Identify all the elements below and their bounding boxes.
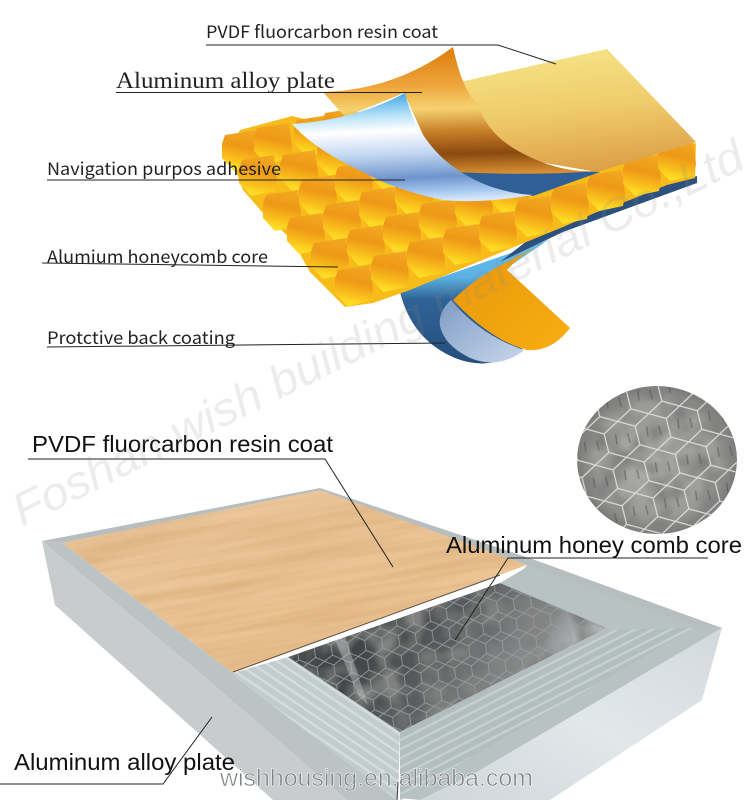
bottom label: PVDF coat: PVDF fluorcarbon resin coat (32, 431, 334, 457)
core base (228, 116, 696, 307)
bottom label: alloy plate (0, 717, 235, 784)
bottom label: honeycomb core: Aluminum honey comb core (446, 532, 742, 558)
front right rim (400, 628, 722, 800)
top label: adhesive: Navigation purpos adhesive (47, 155, 281, 180)
honeycomb window (285, 580, 610, 735)
icon: circular honeycomb detail (575, 385, 740, 535)
top rim (42, 488, 722, 628)
dark seam under wood (233, 575, 500, 672)
curl: orange underside (453, 243, 570, 350)
photo: aluminum panel box (42, 488, 722, 800)
rib ramp: top right (500, 567, 693, 630)
rib ramp: bottom right (400, 628, 693, 798)
left outer face (42, 541, 347, 800)
watermark: website: wishhousing.en.alibaba.com (219, 765, 533, 792)
orange aluminum peel (323, 47, 600, 174)
interior base (400, 565, 722, 800)
illustration: honeycomb core (222, 108, 697, 307)
rib ramp: left (233, 657, 400, 800)
top label: back coating (47, 324, 445, 349)
left rim (42, 541, 398, 800)
top label: PVDF coat (206, 18, 556, 64)
dark blue underside of peel (455, 166, 600, 196)
bottom label: honeycomb core (446, 532, 742, 640)
illustration: top plate and peeling layers (292, 47, 696, 201)
top label: honeycomb core: Alumium honeycomb core (47, 243, 268, 268)
illustration: bottom curled layers (400, 240, 570, 363)
corner seam (397, 782, 398, 800)
top label: PVDF coat: PVDF fluorcarbon resin coat (206, 18, 439, 43)
watermark: company name: Foshan wish building material Co.,Ltd (3, 129, 750, 536)
bottom label: PVDF coat (28, 431, 393, 567)
yellow resin plate (460, 49, 696, 172)
wood panel (62, 490, 526, 673)
top label: back coating: Protctive back coating (47, 324, 235, 349)
curl: dark blue back coating (400, 240, 548, 363)
hex cells (222, 108, 696, 306)
bottom label: alloy plate: Aluminum alloy plate (14, 749, 235, 775)
front right face (420, 628, 722, 800)
blue adhesive peel (292, 93, 533, 201)
curl: pale blue inner face (440, 300, 524, 363)
top label: aluminum alloy plate: Aluminum alloy plate (116, 68, 335, 93)
dark back edge (500, 176, 697, 262)
